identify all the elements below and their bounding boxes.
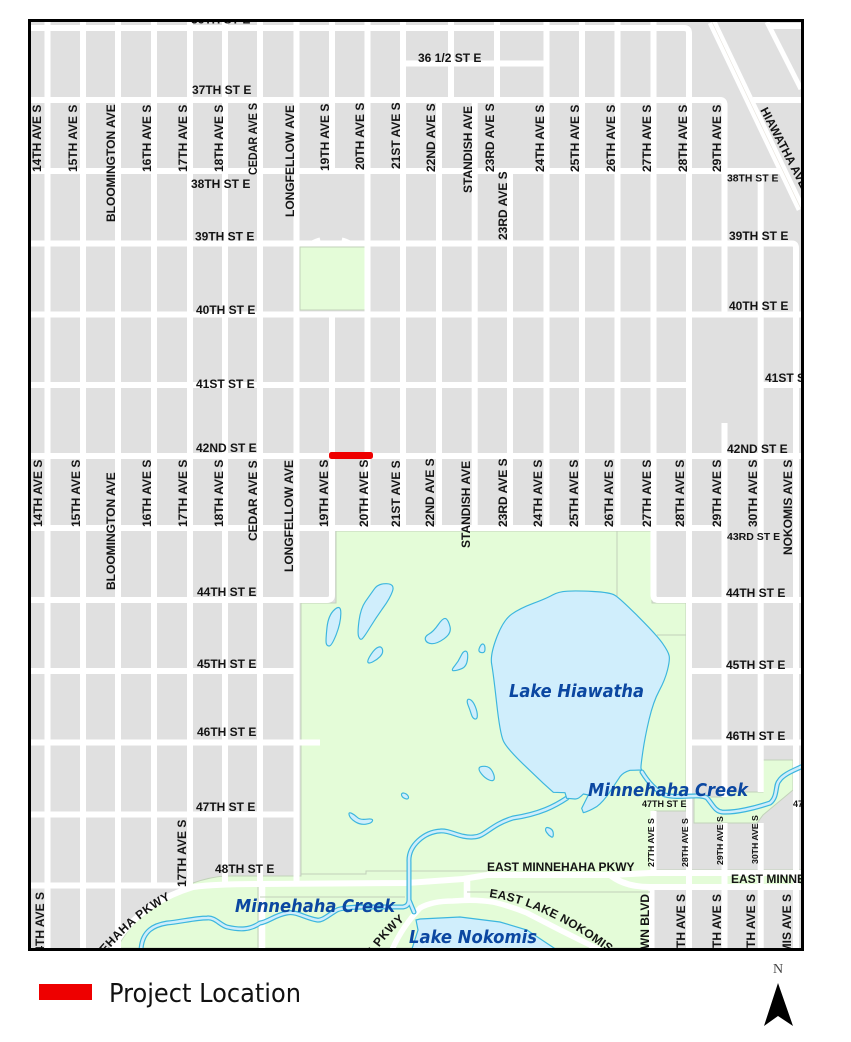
Lake Hiawatha and ponds	[326, 584, 669, 837]
avenue labels: south row: 30TH AVE S	[750, 815, 760, 864]
avenue labels: middle row: 24TH AVE S	[531, 460, 545, 527]
cross street labels: 37TH ST E	[192, 83, 251, 97]
cross street labels: 44TH ST E	[726, 586, 785, 600]
avenue labels: middle row: 29TH AVE S	[710, 460, 724, 527]
cross street labels: 41ST ST E	[196, 377, 255, 391]
cross street labels: 36 1/2 ST E	[418, 51, 481, 65]
avenue labels: middle row: BLOOMINGTON AVE	[104, 472, 118, 590]
creeks	[141, 766, 803, 950]
cross street labels: 47TH ST E	[793, 799, 838, 809]
cross street labels	[191, 12, 851, 886]
parkway labels: HIAWATHA AVE	[757, 105, 811, 191]
avenue labels: middle row: 19TH AVE S	[317, 460, 331, 527]
avenue labels: north row: 17TH AVE S	[176, 105, 190, 172]
avenue labels: north row: 18TH AVE S	[212, 105, 226, 172]
water labels: Minnehaha Creek	[588, 780, 749, 801]
avenue labels: middle row: 30TH AVE S	[746, 460, 760, 527]
avenue labels: north row: BLOOMINGTON AVE	[104, 104, 118, 222]
avenue labels: middle row: 27TH AVE S	[640, 460, 654, 527]
avenue labels: north row: 14TH AVE S	[30, 105, 44, 172]
parks	[117, 247, 801, 948]
parkway labels: MINNEHAHA PKWY	[99, 892, 168, 948]
avenue labels: middle row: 21ST AVE S	[389, 460, 403, 527]
avenue labels: north row: LONGFELLOW AVE	[283, 105, 297, 217]
avenue labels: north row: 16TH AVE S	[140, 105, 154, 172]
cross street labels: 47TH ST E	[196, 800, 255, 814]
avenue labels: middle row: LONGFELLOW AVE	[282, 460, 296, 572]
avenue labels: south row: 17TH AVE S	[175, 820, 189, 887]
avenue labels: middle row: 25TH AVE S	[567, 460, 581, 527]
cross street labels: 47TH ST E	[642, 799, 687, 809]
avenue labels: middle row: 23RD AVE S	[496, 458, 510, 527]
cross street labels: 46TH ST E	[197, 725, 256, 739]
cross street labels: 45TH ST E	[726, 658, 785, 672]
cross street labels: 43RD ST E	[727, 531, 780, 543]
cross street labels: 45TH ST E	[197, 657, 256, 671]
cross street labels: 38TH ST E	[727, 174, 778, 184]
cross street labels: 40TH ST E	[196, 303, 255, 317]
avenue labels: south row: 28TH AVE S	[674, 894, 688, 961]
project location segment	[329, 452, 373, 459]
cross street labels: 42ND ST E	[727, 442, 788, 456]
cross street labels: 40TH ST E	[729, 299, 788, 313]
avenue labels: north row: CEDAR AVE S	[246, 103, 260, 175]
avenue labels: middle row: 22ND AVE S	[423, 458, 437, 527]
legend: project location	[39, 979, 301, 1009]
cross street labels: 36TH ST E	[191, 12, 250, 26]
avenue labels: south row: 27TH AVE S	[646, 818, 656, 867]
avenue labels: north row: 27TH AVE S	[640, 105, 654, 172]
avenue labels: middle row: NOKOMIS AVE S	[781, 460, 795, 555]
cross street labels: 39TH ST E	[195, 230, 254, 244]
legend: project location: Project Location	[109, 979, 301, 1009]
avenue labels: north row: 21ST AVE S	[389, 102, 403, 169]
water labels	[235, 681, 749, 948]
avenue labels: middle row: 20TH AVE S	[357, 460, 371, 527]
avenue labels: north row: STANDISH AVE	[461, 106, 475, 193]
avenue labels: middle row: 14TH AVE S	[31, 460, 45, 527]
avenue labels: north row: 20TH AVE S	[353, 103, 367, 170]
avenue labels: north row: 15TH AVE S	[66, 105, 80, 172]
avenue labels: north row: 25TH AVE S	[568, 105, 582, 172]
avenue labels: south row	[33, 815, 794, 989]
avenue labels: middle row: 18TH AVE S	[212, 460, 226, 527]
north arrow	[764, 962, 793, 1026]
cross street labels: 48TH ST E	[215, 862, 274, 876]
north arrow: N	[773, 962, 783, 977]
cross street labels: 46TH ST E	[726, 729, 785, 743]
avenue labels: middle row	[31, 458, 795, 590]
avenue labels: middle row: 15TH AVE S	[69, 460, 83, 527]
avenue labels: north row: 26TH AVE S	[604, 105, 618, 172]
avenue labels: south row: NOKOMIS AVE S	[780, 894, 794, 989]
avenue labels: middle row: STANDISH AVE	[459, 461, 473, 548]
cross street labels: 44TH ST E	[197, 585, 256, 599]
parkway labels: E PKWY	[368, 914, 402, 948]
avenue labels: south row: 29TH AVE S	[715, 816, 725, 865]
avenue labels: north row: 22ND AVE S	[424, 103, 438, 172]
avenue labels: middle row: 17TH AVE S	[176, 460, 190, 527]
avenue labels: south row: 14TH AVE S	[33, 892, 47, 959]
parkway labels: EAST LAKE NOKOMIS	[490, 889, 612, 948]
cross street labels: 42ND ST E	[196, 441, 257, 455]
avenue labels: middle row: 16TH AVE S	[140, 460, 154, 527]
Lake Nokomis	[412, 916, 555, 948]
park boundary lines	[258, 531, 686, 948]
water labels: Lake Nokomis	[409, 927, 537, 948]
avenue labels: north row: 24TH AVE S	[533, 105, 547, 172]
avenue labels: north row: 23RD AVE S	[496, 171, 510, 240]
parkway labels	[99, 106, 801, 1022]
avenue labels: middle row: 28TH AVE S	[673, 460, 687, 527]
avenue labels: north row: 28TH AVE S	[676, 105, 690, 172]
avenue labels: south row: 30TH AVE S	[744, 894, 758, 961]
avenue labels: north row: 23RD AVE S	[483, 103, 497, 172]
avenue labels: south row: 28TH AVE S	[680, 818, 690, 867]
cross street labels: 39TH ST E	[729, 229, 788, 243]
avenue labels: middle row: 26TH AVE S	[602, 460, 616, 527]
avenue labels: north row: 19TH AVE S	[318, 104, 332, 171]
cross street labels: 41ST ST E	[765, 371, 824, 385]
avenue labels: middle row: CEDAR AVE S	[246, 460, 260, 541]
avenue labels: south row: 29TH AVE S	[710, 894, 724, 961]
avenue labels: north row: 29TH AVE S	[710, 105, 724, 172]
cross street labels: EAST MINNEHAHA PKWY	[487, 860, 635, 874]
water labels: Minnehaha Creek	[235, 896, 396, 917]
avenue labels: north row	[30, 102, 724, 240]
cross street labels: 38TH ST E	[191, 177, 250, 191]
water labels: Lake Hiawatha	[509, 681, 644, 702]
avenue labels: south row: WN BLVD	[638, 894, 652, 949]
